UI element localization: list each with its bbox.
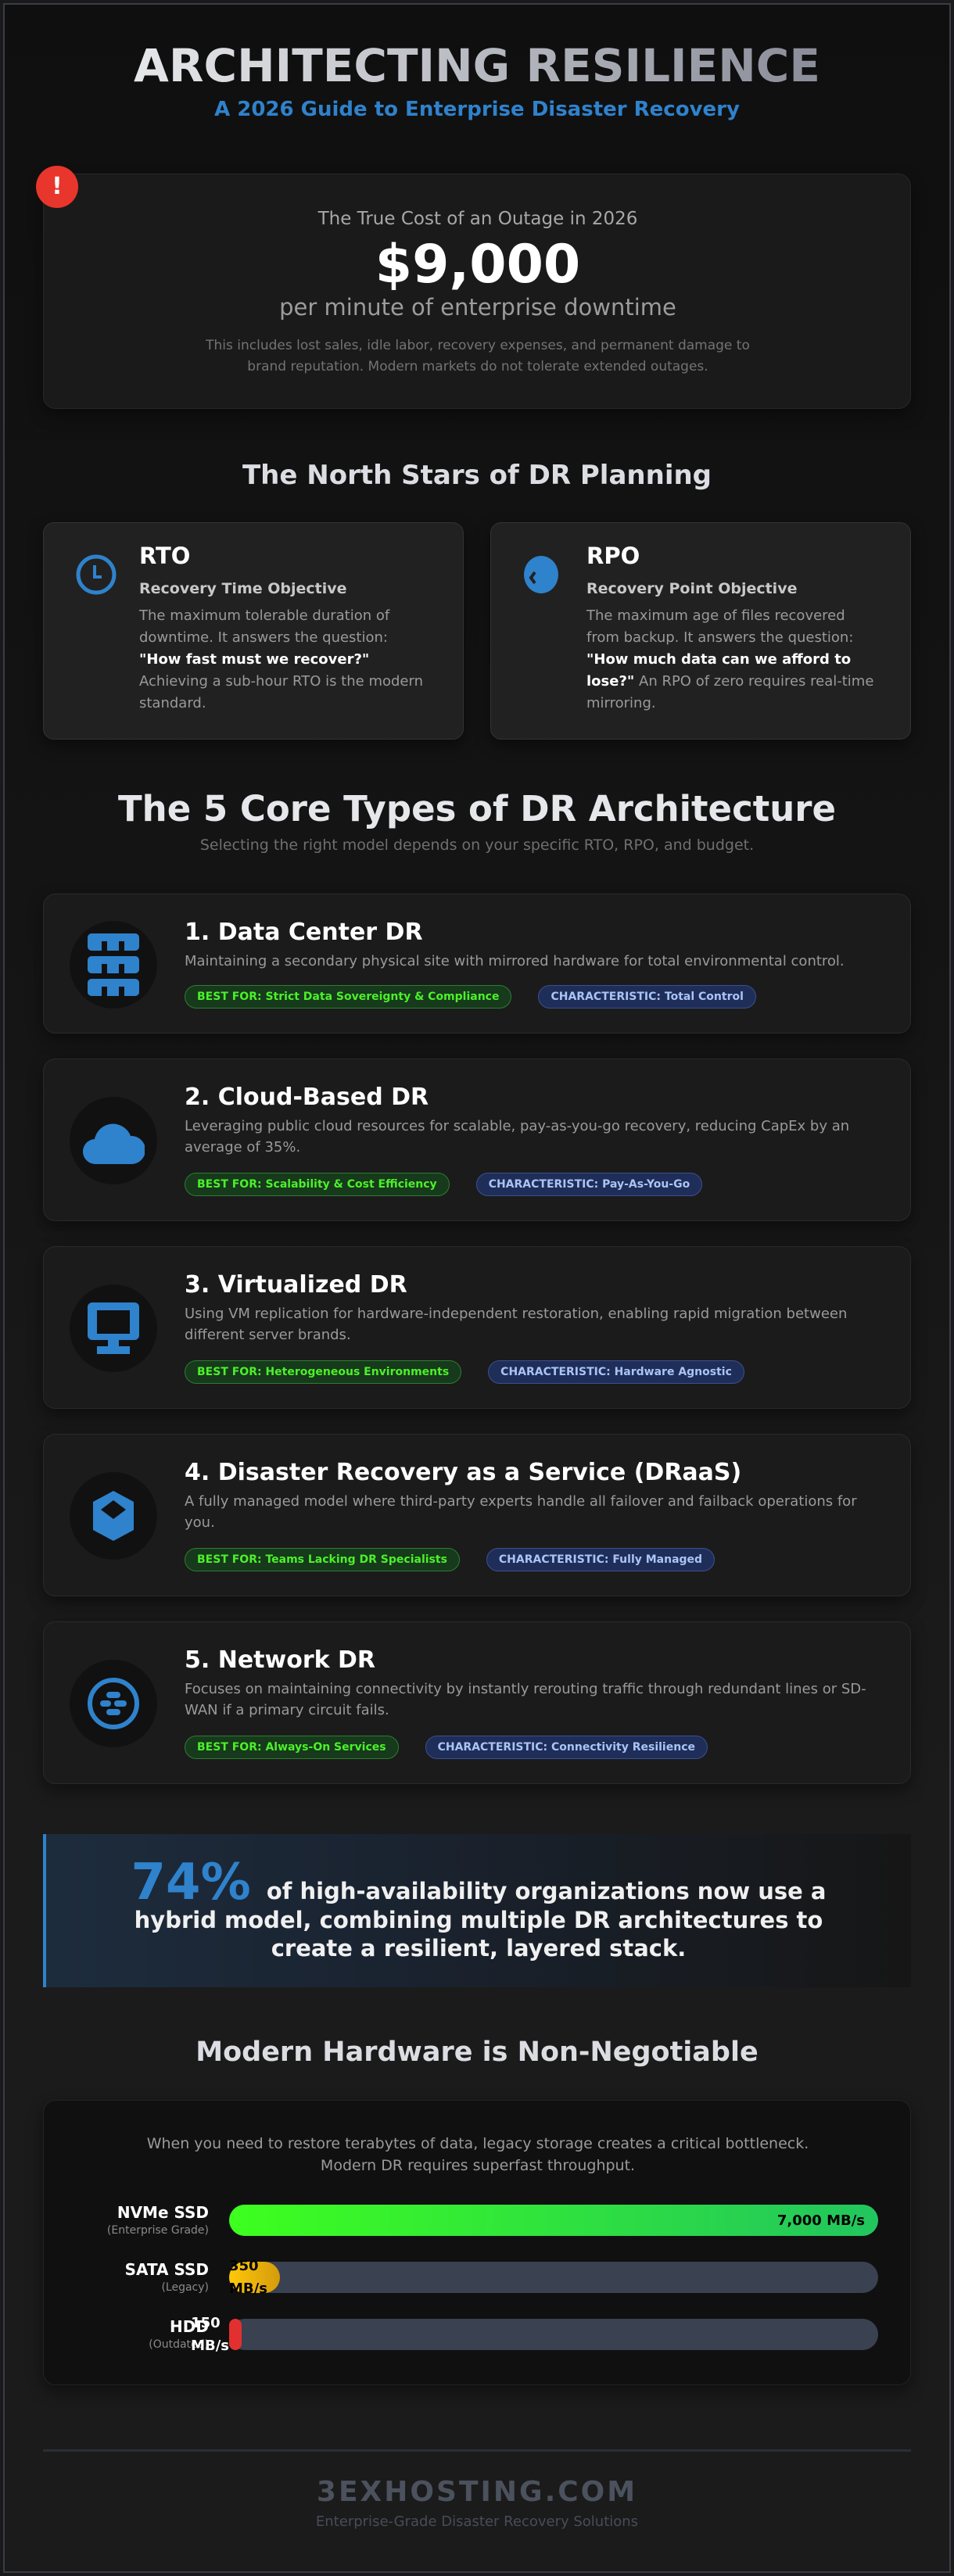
footer brand: 3EXHOSTING.COM — [317, 2476, 637, 2508]
panel: hardware chart — [43, 2100, 911, 2385]
stat line 1: 74% of high-availability organizations now use a — [131, 1854, 826, 1911]
bar: HDD — [149, 2317, 209, 2351]
subtitle: A 2026 Guide to Enterprise Disaster Recovery — [214, 98, 740, 121]
icon: servers — [70, 921, 157, 1009]
panel: cost of outage — [43, 174, 911, 409]
stat lines 2-3: create a resilient, layered stack. — [271, 1935, 686, 1962]
panel: network DR: WAN if a primary circuit fails. — [185, 1702, 389, 1718]
panel: network DR — [43, 1621, 911, 1784]
subheading: Selecting the right model depends on your specific RTO, RPO, and budget. — [200, 837, 754, 854]
icon: cube — [70, 1472, 157, 1560]
panel: RTO: "How fast must we recover?" — [139, 651, 369, 668]
panel: data center DR: BEST FOR: Strict Data Sovereignty & Compliance — [197, 991, 499, 1003]
icon: clock — [77, 555, 116, 594]
panel: data center DR: CHARACTERISTIC: Total Control — [551, 991, 744, 1003]
panel: cloud DR: average of 35%. — [185, 1139, 300, 1155]
bar chart: 350 MB/s — [229, 2258, 267, 2297]
panel: RTO: Recovery Time Objective — [139, 580, 347, 597]
cost label: The True Cost of an Outage in 2026 — [318, 209, 637, 229]
panel: RTO: standard. — [139, 695, 206, 711]
panel: RPO: lose?" An RPO of zero requires real-time — [586, 673, 873, 690]
bar: SATA — [125, 2260, 209, 2294]
panel: virtualized DR: CHARACTERISTIC: Hardware Agnostic — [500, 1366, 732, 1378]
panel: network DR: BEST FOR: Always-On Services — [197, 1741, 386, 1754]
panel: virtualized DR: Using VM replication for hardware-independent restoration, enabling rapid migration between — [185, 1306, 847, 1322]
panel: virtualized DR — [43, 1246, 911, 1409]
panel: network DR: Focuses on maintaining connectivity by instantly rerouting traffic through redundant lines or SD- — [185, 1681, 866, 1697]
icon: network — [70, 1660, 157, 1747]
panel: DRaaS — [43, 1434, 911, 1596]
big number: $9,000 — [375, 234, 580, 296]
intro text — [147, 2135, 809, 2174]
intro text: When you need to restore terabytes of data, legacy storage creates a critical bottleneck. — [147, 2135, 809, 2152]
description: This includes lost sales, idle labor, recovery expenses, and permanent damage to — [206, 338, 750, 353]
intro text: Modern DR requires superfast throughput. — [321, 2157, 635, 2174]
panel: data center DR: Maintaining a secondary physical site with mirrored hardware for total environmental control. — [185, 953, 845, 969]
panel: cloud DR: CHARACTERISTIC: Pay-As-You-Go — [489, 1178, 690, 1191]
panel: virtualized DR: BEST FOR: Heterogeneous Environments — [197, 1366, 449, 1378]
bar chart — [107, 2203, 878, 2354]
panel: cloud DR — [43, 1059, 911, 1221]
panel: DRaaS: you. — [185, 1514, 215, 1531]
panel: RTO: RTO — [139, 543, 190, 569]
panel: RPO: from backup. It answers the question: — [586, 629, 853, 646]
bar: NVMe: NVMe SSD — [117, 2203, 209, 2222]
heading: modern hardware: Modern Hardware is Non-Negotiable — [195, 2037, 759, 2068]
panel: RTO: downtime. It answers the question: — [139, 629, 388, 646]
footer tagline: Enterprise-Grade Disaster Recovery Solutions — [316, 2513, 638, 2530]
bar: SATA: SATA SSD — [125, 2260, 209, 2279]
panel: virtualized DR: different server brands. — [185, 1327, 351, 1343]
bar: NVMe: (Enterprise Grade) — [107, 2224, 209, 2237]
heading: north stars: The North Stars of DR Planning — [242, 460, 712, 491]
heading: 5 core types: The 5 Core Types of DR Architecture — [118, 788, 836, 829]
icon: alert — [36, 166, 78, 208]
panel: RPO: RPO — [586, 543, 640, 569]
panel: RPO: The maximum age of files recovered — [586, 607, 845, 624]
bar: HDD: HDD — [170, 2317, 209, 2336]
panel: RTO: The maximum tolerable duration of — [139, 607, 389, 624]
panel: DRaaS: A fully managed model where third-party experts handle all failover and failback operations for — [185, 1493, 857, 1510]
panel: network DR: CHARACTERISTIC: Connectivity Resilience — [438, 1741, 695, 1754]
panel: virtualized DR: 3. Virtualized DR — [185, 1271, 407, 1299]
bar: SATA: (Legacy) — [161, 2281, 209, 2294]
panel: RPO: mirroring. — [586, 695, 656, 711]
title: ARCHITECTING RESILIENCE — [134, 39, 820, 92]
panel: cloud DR: Leveraging public cloud resources for scalable, pay-as-you-go recovery, reducing CapEx by an — [185, 1118, 849, 1134]
panel: RTO — [43, 522, 464, 740]
bar chart: 150 MB/s — [191, 2315, 229, 2354]
panel: cloud DR: 2. Cloud-Based DR — [185, 1084, 429, 1111]
panel: RPO: Recovery Point Objective — [586, 580, 797, 597]
bar: NVMe — [107, 2203, 209, 2237]
description: brand reputation. Modern markets do not tolerate extended outages. — [247, 359, 708, 374]
panel: RPO — [490, 522, 911, 740]
panel: DRaaS: BEST FOR: Teams Lacking DR Specialists — [197, 1553, 447, 1566]
icon: alert: ! — [52, 173, 63, 200]
description — [206, 338, 750, 374]
icon: backup — [524, 556, 558, 593]
callout: hybrid stat — [43, 1834, 911, 1987]
icon: monitor — [70, 1284, 157, 1372]
panel: data center DR — [43, 894, 911, 1034]
bar: HDD: (Outdated) — [149, 2338, 209, 2351]
panel: RTO: Achieving a sub-hour RTO is the modern — [139, 673, 423, 690]
panel: DRaaS: 4. Disaster Recovery as a Service (DRaaS) — [185, 1459, 741, 1486]
panel: DRaaS: CHARACTERISTIC: Fully Managed — [499, 1553, 702, 1566]
panel: data center DR: 1. Data Center DR — [185, 919, 423, 946]
panel: RPO: "How much data can we afford to — [586, 651, 851, 668]
panel: cloud DR: BEST FOR: Scalability & Cost Efficiency — [197, 1178, 437, 1191]
icon: cloud — [70, 1097, 157, 1184]
panel: network DR: 5. Network DR — [185, 1646, 375, 1674]
stat lines 2-3: hybrid model, combining multiple DR architectures to — [134, 1907, 823, 1933]
per minute: per minute of enterprise downtime — [279, 294, 676, 321]
stat lines 2-3 — [134, 1907, 823, 1962]
bar chart: 7,000 MB/s — [777, 2212, 865, 2228]
